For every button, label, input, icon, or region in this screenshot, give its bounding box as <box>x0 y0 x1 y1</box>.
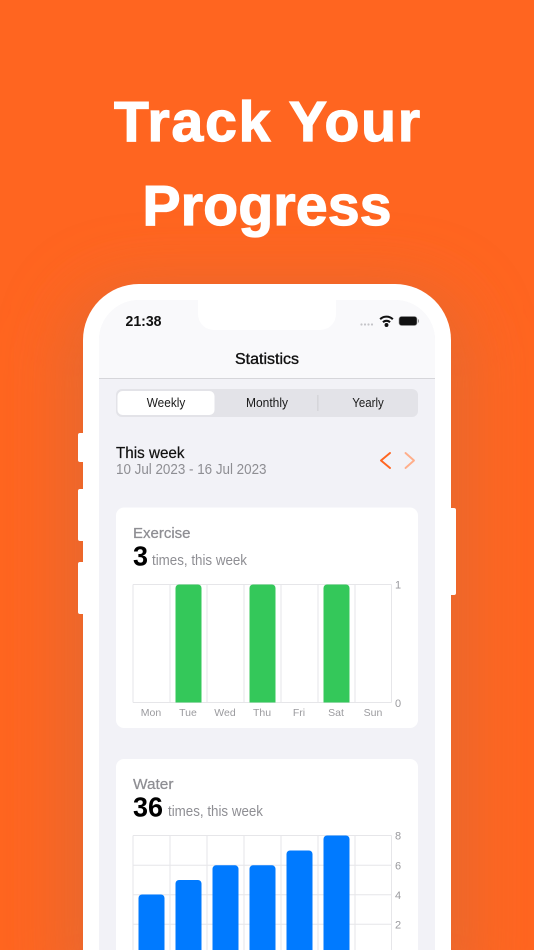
date range heading: This week <box>116 445 185 462</box>
panel: exercise: Exercise <box>133 525 190 542</box>
segmented control: Monthly <box>246 395 288 410</box>
bar chart: water: 2 <box>395 920 401 932</box>
segmented control <box>116 389 418 417</box>
bar chart: water: 8 <box>395 830 401 842</box>
notch <box>198 300 336 330</box>
panel: water: times, this week <box>168 804 264 820</box>
bar chart: water <box>133 830 401 950</box>
panel: water <box>116 759 418 950</box>
icon: previous arrow <box>381 453 390 468</box>
panel: exercise: times, this week <box>152 553 248 569</box>
navigation bar <box>99 352 435 379</box>
bar chart: exercise: Tue <box>179 707 197 719</box>
phone frame <box>83 284 451 950</box>
title: Track Your <box>114 90 420 154</box>
bar chart: exercise: Wed <box>214 707 236 719</box>
panel: water: Water <box>133 776 174 793</box>
bar chart: exercise: 1 <box>395 580 401 592</box>
icon: wifi <box>380 317 393 326</box>
bar chart: water: 6 <box>395 860 401 872</box>
segmented control: Weekly <box>147 395 186 410</box>
bar chart: exercise: Thu <box>253 707 271 719</box>
segmented control: Yearly <box>352 395 384 410</box>
title: Progress <box>142 174 392 238</box>
status bar <box>126 316 419 327</box>
icon: battery <box>399 316 419 326</box>
bar chart: exercise: Sat <box>328 707 344 719</box>
panel: exercise: 3 <box>133 540 148 572</box>
panel: water: 36 <box>133 792 163 822</box>
bar chart: exercise: 0 <box>395 698 401 710</box>
side buttons <box>78 433 456 614</box>
arrows <box>381 453 414 468</box>
bar chart: exercise <box>133 580 401 719</box>
navigation bar: Statistics <box>235 351 299 368</box>
signal dots <box>360 324 373 326</box>
bar chart: exercise: Sun <box>364 707 382 719</box>
date range heading <box>116 446 266 474</box>
bar chart: exercise: Mon <box>141 707 161 719</box>
date range heading: 10 Jul 2023 - 16 Jul 2023 <box>116 462 266 478</box>
icon: next arrow <box>406 453 414 468</box>
panel: exercise <box>116 508 418 728</box>
bar chart: water: 4 <box>395 890 401 902</box>
status bar: 21:38 <box>126 314 162 330</box>
title <box>114 90 420 238</box>
phone mockup <box>78 284 456 950</box>
bar chart: exercise: Fri <box>293 707 305 719</box>
screen <box>99 300 435 950</box>
